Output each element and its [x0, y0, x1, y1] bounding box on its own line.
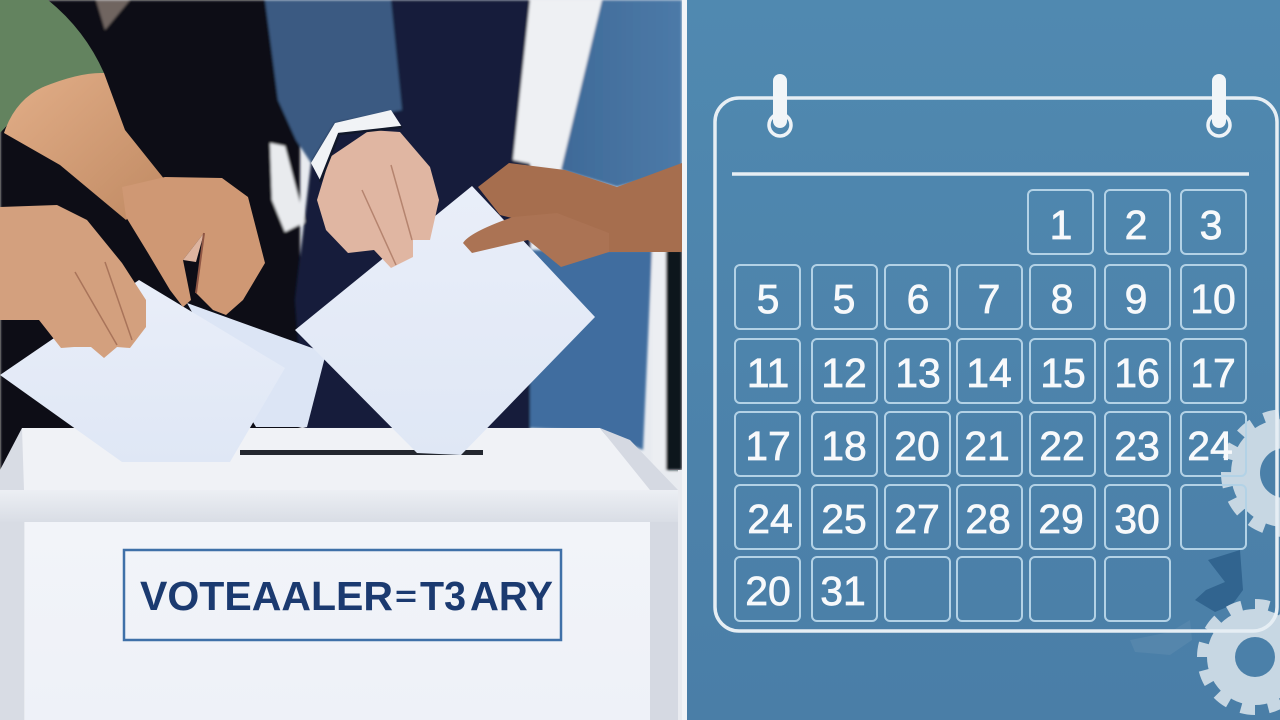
- box label: =: [395, 580, 417, 613]
- green sleeve: [0, 0, 104, 133]
- row 3: 15: [1040, 350, 1086, 396]
- row 5: 24: [747, 496, 793, 542]
- forearm: upper left: [4, 73, 165, 220]
- ballot box: [0, 428, 682, 720]
- icon: lower gear: [1203, 605, 1280, 709]
- calendar frame: [715, 98, 1277, 631]
- row 3: 14: [966, 350, 1012, 396]
- hand: lower left: [0, 205, 146, 358]
- hand: upper left: [122, 177, 265, 315]
- box label: ARY: [470, 573, 553, 619]
- divider: [682, 0, 687, 720]
- row 1: 1: [1050, 202, 1072, 248]
- row 6: [735, 557, 1170, 621]
- row 2: [735, 265, 1246, 329]
- faint gear shadow: [1130, 620, 1192, 655]
- forearm and fingers: right hand: [478, 163, 682, 252]
- row 5: 30: [1114, 496, 1160, 542]
- box label: [124, 550, 561, 640]
- row 5: [735, 485, 1246, 549]
- panel: voting photo: [0, 0, 682, 720]
- hand: right thumb: [463, 213, 609, 267]
- row 2: 10: [1190, 276, 1236, 322]
- row 4: 24: [1187, 423, 1233, 469]
- icon: right binder ring: [1208, 74, 1230, 136]
- box label: T3: [420, 573, 466, 619]
- row 2: 6: [907, 276, 929, 322]
- calendar grid: [735, 190, 1246, 621]
- row 4: 22: [1039, 423, 1085, 469]
- ballot: left: [0, 280, 285, 462]
- row 6: 31: [820, 568, 866, 614]
- row 3: 16: [1114, 350, 1160, 396]
- ballot slot: [240, 450, 483, 455]
- panel: calendar background: [687, 0, 1280, 720]
- row 4: 21: [964, 423, 1010, 469]
- ballot: center: [295, 186, 595, 455]
- box label: VOTEAALER: [140, 573, 393, 619]
- row 3: 11: [747, 350, 789, 396]
- row 4: 20: [894, 423, 940, 469]
- ballot: rear: [187, 303, 326, 427]
- row 2: 5: [833, 276, 855, 322]
- row 4: 23: [1114, 423, 1160, 469]
- row 4: [735, 412, 1246, 476]
- row 3: [735, 339, 1246, 403]
- row 5: 25: [821, 496, 867, 542]
- row 3: 13: [895, 350, 941, 396]
- row 1: 2: [1125, 202, 1147, 248]
- hand: center: [317, 130, 439, 268]
- row 5: 29: [1038, 496, 1084, 542]
- row 5: 27: [894, 496, 940, 542]
- background figures: [0, 0, 682, 470]
- row 1: [1028, 190, 1246, 254]
- icon: left binder ring: [769, 74, 791, 136]
- row 3: 12: [821, 350, 867, 396]
- icon: upper gear: [1227, 415, 1280, 531]
- gears: [1130, 415, 1280, 709]
- row 2: 8: [1051, 276, 1073, 322]
- row 2: 5: [757, 276, 779, 322]
- row 1: 3: [1200, 202, 1222, 248]
- row 4: 18: [821, 423, 867, 469]
- shirt cuff: [311, 110, 402, 182]
- gear fragments: [1195, 550, 1243, 612]
- row 2: 9: [1125, 276, 1147, 322]
- row 4: 17: [745, 423, 791, 469]
- row 3: 17: [1190, 350, 1236, 396]
- row 6: 20: [745, 568, 791, 614]
- row 2: 7: [978, 276, 1000, 322]
- row 5: 28: [965, 496, 1011, 542]
